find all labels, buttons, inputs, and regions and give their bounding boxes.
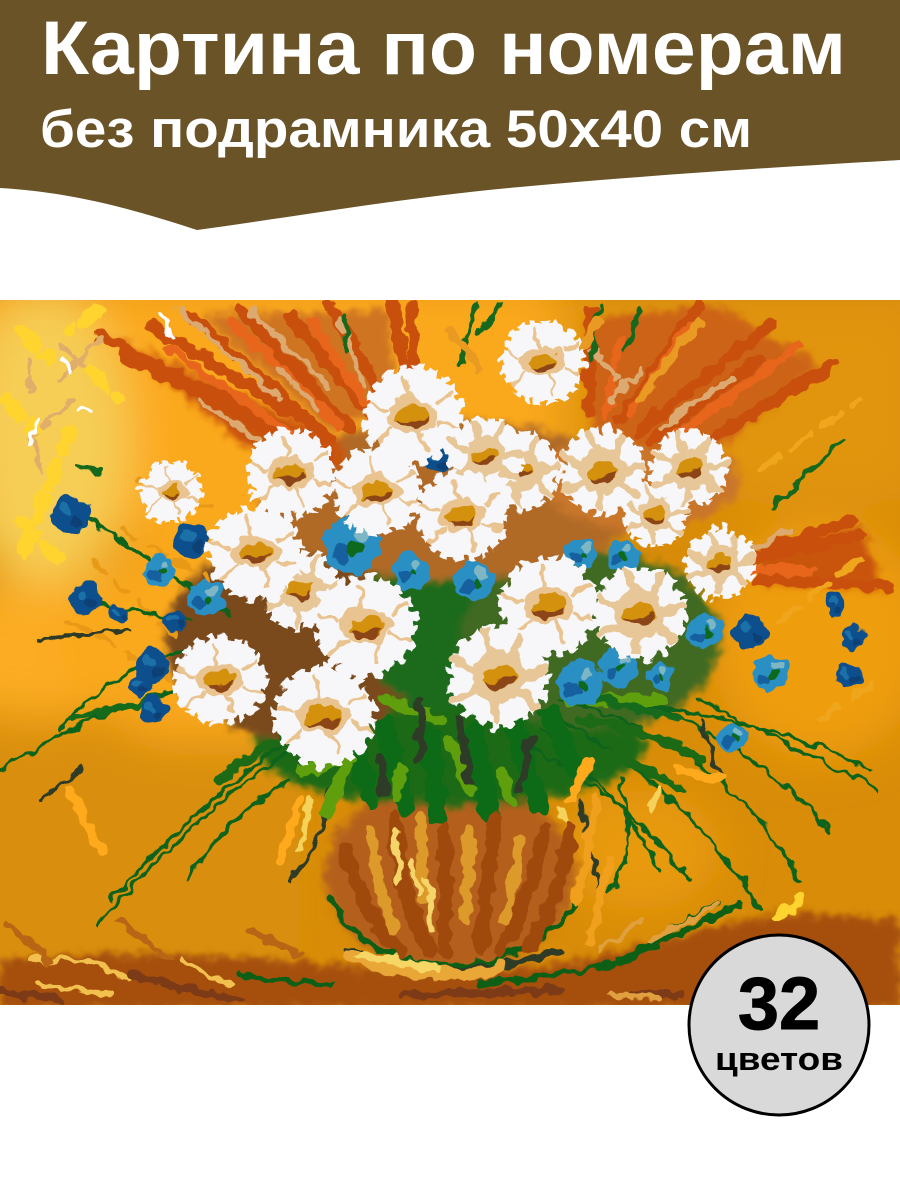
painting: bouquet of daisies and cornflowers in a vase — [0, 280, 900, 1010]
wheat and grass strokes, top — [5, 300, 885, 720]
header banner — [0, 0, 900, 230]
cornflowers — [52, 446, 865, 752]
badge label: цветов — [715, 1041, 843, 1077]
subtitle: без подрамника 50х40 см — [40, 100, 752, 159]
stems and grass strokes — [0, 520, 880, 985]
vase — [345, 800, 610, 975]
title: Картина по номерам — [41, 6, 846, 91]
foreground ground strokes — [0, 900, 800, 1000]
daisies — [142, 322, 754, 764]
badge number: 32 — [738, 962, 820, 1045]
badge: 32 colours — [689, 935, 869, 1115]
